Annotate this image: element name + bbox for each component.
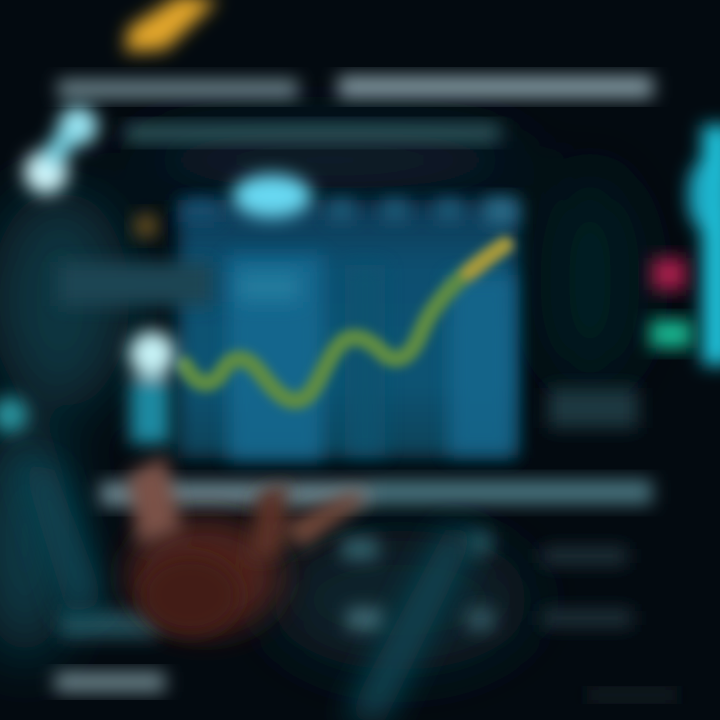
icon: glowing nodes xyxy=(24,106,98,194)
title xyxy=(58,76,653,98)
background glow xyxy=(0,130,640,670)
diagonal teal streaks xyxy=(20,460,478,720)
palm xyxy=(127,517,283,633)
header highlight xyxy=(232,174,312,218)
subtitle xyxy=(125,124,500,142)
table header band xyxy=(100,480,652,506)
fingers xyxy=(128,455,365,635)
chart header cells xyxy=(182,198,518,224)
panel: chart xyxy=(178,174,518,460)
table rows xyxy=(60,532,632,638)
line chart xyxy=(185,245,505,401)
cyan edge bar xyxy=(688,125,720,365)
icon: orange marker xyxy=(134,214,158,238)
green indicator xyxy=(650,320,692,348)
bottom left label xyxy=(55,672,165,692)
icon: yellow streak xyxy=(125,0,218,52)
left data block xyxy=(58,262,300,306)
right data block xyxy=(548,388,638,428)
icon: glowing start node xyxy=(0,331,175,444)
panel: right side indicators xyxy=(548,125,720,428)
chart columns xyxy=(228,255,514,460)
chart background xyxy=(178,200,518,458)
icon: hand xyxy=(127,455,365,635)
bottom right label xyxy=(587,690,677,700)
pink indicator xyxy=(652,258,686,290)
